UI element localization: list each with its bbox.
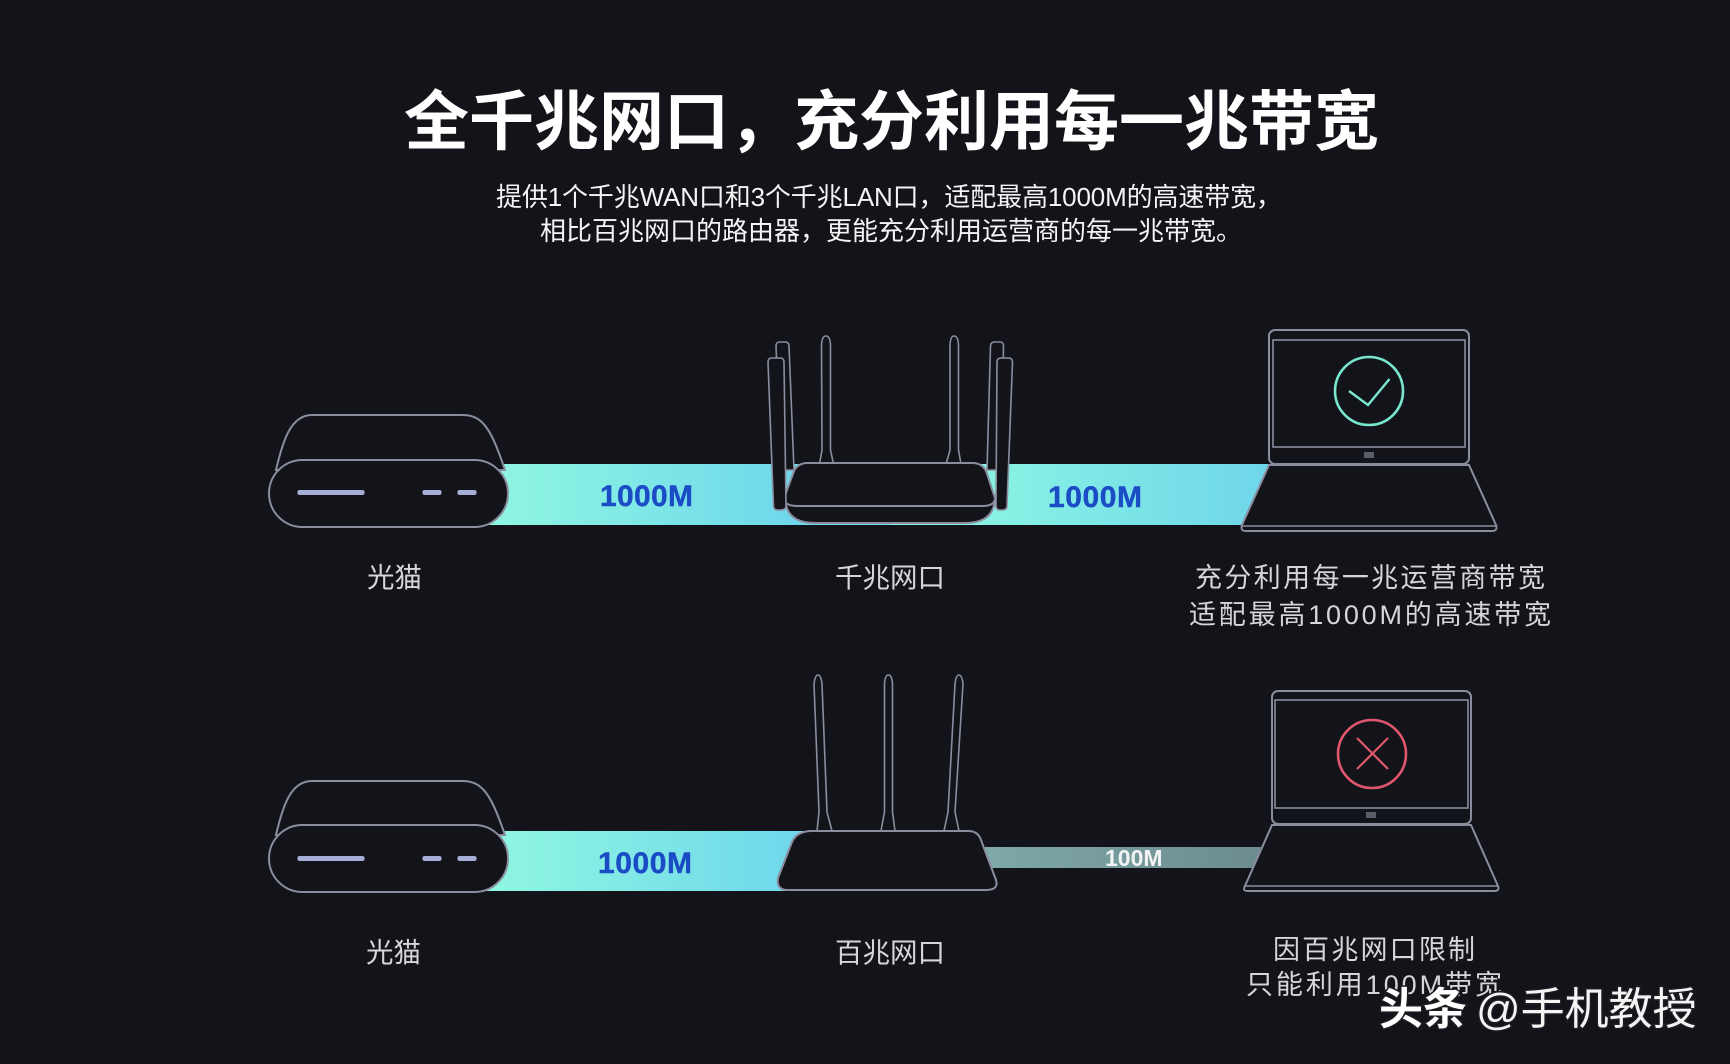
speed band: modem to router: [480, 464, 890, 525]
watermark: @手机教授: [1476, 985, 1697, 1034]
row: gigabit: [269, 330, 1551, 630]
caption: modem: 光猫: [366, 937, 421, 968]
icon: laptop with check: [1242, 330, 1496, 531]
caption: 100M port: 百兆网口: [835, 937, 945, 968]
title: 全千兆网口，充分利用每一兆带宽: [404, 85, 1379, 158]
icon: laptop with cross: [1244, 691, 1498, 891]
watermark: 头条: [1379, 985, 1467, 1034]
speed label: 100M: 100M: [1105, 845, 1163, 871]
speed label: 1000M left: 1000M: [600, 480, 693, 513]
subtitle: 相比百兆网口的路由器，更能充分利用运营商的每一兆带宽。: [540, 216, 1242, 246]
watermark: [1379, 985, 1697, 1034]
speed band: modem to router: [480, 831, 890, 891]
icon: gigabit router: [768, 336, 1012, 523]
caption: 100M result: 因百兆网口限制: [1273, 935, 1475, 965]
icon: 100M router: [778, 675, 997, 890]
caption: 100M result: 只能利用100M带宽: [1246, 970, 1502, 1000]
subtitle: [496, 182, 1282, 246]
icon: modem: [269, 415, 508, 527]
icon: modem: [269, 781, 508, 892]
row: 100M: [269, 675, 1502, 1000]
caption: modem: 光猫: [367, 562, 422, 593]
caption: gigabit result: 适配最高1000M的高速带宽: [1189, 600, 1551, 630]
caption: 100M result: [1246, 935, 1502, 1000]
speed band: router to laptop: [890, 464, 1270, 525]
caption: gigabit port: 千兆网口: [835, 562, 945, 593]
caption: gigabit result: [1189, 563, 1551, 630]
speed label: 1000M right: 1000M: [1048, 481, 1142, 514]
caption: gigabit result: 充分利用每一兆运营商带宽: [1195, 563, 1545, 593]
speed label: 1000M: 1000M: [598, 847, 692, 880]
speed band: router to laptop: [985, 847, 1261, 868]
subtitle: 提供1个千兆WAN口和3个千兆LAN口，适配最高1000M的高速带宽，: [496, 182, 1282, 212]
